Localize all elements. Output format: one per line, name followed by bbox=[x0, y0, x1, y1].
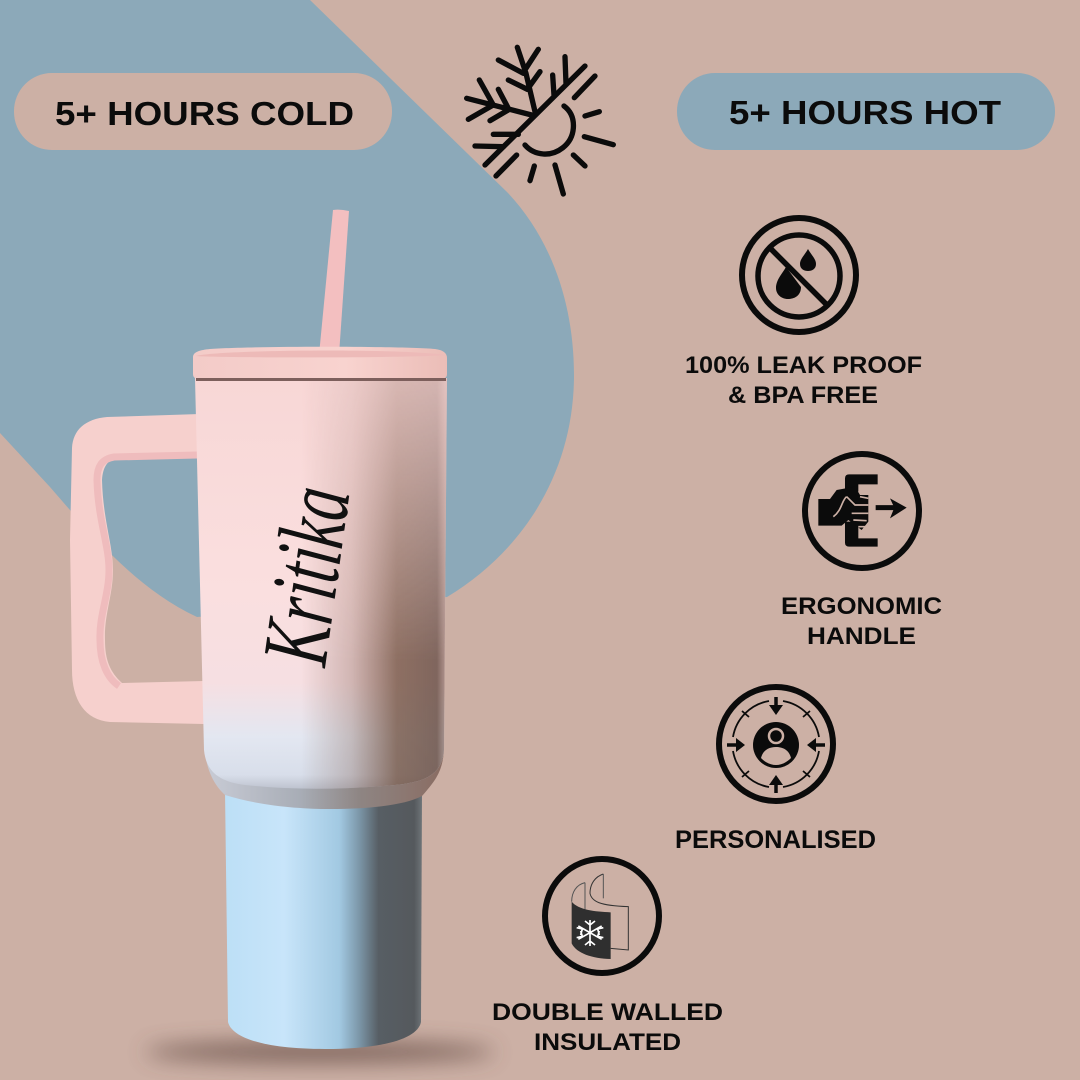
upper body bbox=[195, 378, 447, 789]
handle bbox=[70, 414, 204, 724]
ledge band bbox=[204, 745, 444, 809]
label: PERSONALISED bbox=[675, 826, 876, 854]
straw bbox=[319, 210, 349, 355]
icon: hand gripping handle bbox=[805, 454, 919, 568]
handle inner edge bbox=[97, 455, 197, 686]
icon: person target bbox=[719, 687, 833, 801]
icon: no drop bbox=[742, 218, 856, 332]
pill: 5+ hours hot: 5+ HOURS HOT bbox=[729, 94, 1001, 131]
feature: double walled insulated bbox=[492, 859, 723, 1056]
label line 2: INSULATED bbox=[534, 1029, 681, 1056]
pill: 5+ hours cold: 5+ HOURS COLD bbox=[55, 95, 354, 132]
name: Kritika: Kritika bbox=[243, 480, 371, 672]
label: ERGONOMIC bbox=[781, 593, 942, 620]
tumbler bbox=[70, 210, 495, 1063]
icon: insulated layers bbox=[545, 859, 659, 973]
lid bbox=[193, 347, 447, 379]
label line 2: HANDLE bbox=[807, 623, 916, 650]
upper body shading bbox=[309, 378, 447, 788]
pill: 5+ hours cold bbox=[14, 73, 392, 150]
lid gap line bbox=[196, 378, 446, 381]
feature: leak proof bbox=[685, 218, 922, 409]
lower body bbox=[225, 790, 422, 1049]
lid top surface bbox=[196, 351, 445, 357]
ground shadow bbox=[145, 1041, 495, 1063]
feature: ergonomic handle bbox=[781, 454, 942, 650]
label: DOUBLE WALLED bbox=[492, 999, 723, 1026]
pill: 5+ hours hot bbox=[677, 73, 1055, 150]
icon: snowflake and sun bbox=[467, 47, 613, 194]
blue blob shape bbox=[0, 0, 574, 617]
label: 100% LEAK PROOF bbox=[685, 352, 922, 379]
feature: personalised bbox=[675, 687, 876, 854]
label line 2: & BPA FREE bbox=[728, 382, 878, 409]
